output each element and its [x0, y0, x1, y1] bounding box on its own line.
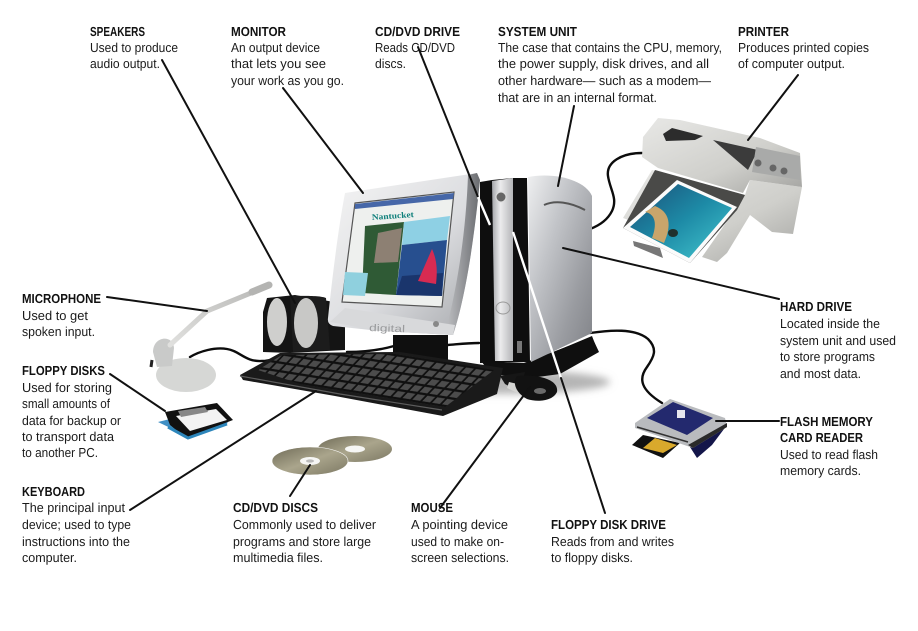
text: keyboard: KEYBOARD [22, 484, 85, 499]
text: mouse [411, 500, 509, 565]
text: mouse: MOUSE [411, 500, 453, 515]
text: mouse: A pointing device [411, 517, 508, 532]
leader: keyboard [130, 391, 316, 510]
text: mouse: screen selections. [411, 550, 509, 565]
text: speakers [90, 24, 178, 71]
monitor screen [342, 192, 454, 307]
icon: CD/DVD discs [272, 436, 392, 475]
leader: monitor [283, 88, 363, 193]
icon: monitor [328, 173, 480, 362]
text: flash memory card reader: FLASH MEMORY [780, 414, 873, 429]
text: CD/DVD drive: CD/DVD DRIVE [375, 24, 460, 39]
text: printer: of computer output. [738, 56, 845, 71]
text: system unit: SYSTEM UNIT [498, 24, 577, 39]
icon: microphone [151, 285, 269, 392]
text: keyboard: The principal input [22, 500, 125, 515]
text: printer: PRINTER [738, 24, 790, 39]
text: system unit: other hardware— such as a modem— [498, 73, 711, 88]
text: CD/DVD discs [233, 500, 377, 565]
text: microphone: spoken input. [22, 324, 95, 339]
text: monitor: MONITOR [231, 24, 287, 39]
text: keyboard: computer. [22, 550, 77, 565]
text: microphone: MICROPHONE [22, 291, 101, 306]
text: system unit: that are in an internal format. [498, 90, 657, 105]
text: microphone: Used to get [22, 308, 88, 323]
text: floppy disk drive [551, 517, 674, 565]
text: CD/DVD drive: Reads CD/DVD [375, 40, 455, 55]
text: microphone [22, 291, 101, 339]
text: hard drive: HARD DRIVE [780, 299, 852, 314]
text: hard drive [780, 299, 896, 381]
printed photo [623, 180, 737, 263]
leader: hard drive [563, 248, 779, 299]
icon: flash memory card reader [632, 399, 727, 458]
text: monitor: An output device [231, 40, 320, 55]
text: speakers: audio output. [90, 56, 160, 71]
text: system unit: The case that contains the CPU, memory, [498, 40, 722, 55]
text: floppy disks: Used for storing [22, 380, 112, 395]
icon: keyboard [240, 352, 503, 416]
text: hard drive: system unit and used [780, 333, 896, 348]
text: hard drive: and most data. [780, 366, 861, 381]
icon: speakers [263, 295, 345, 353]
text: CD/DVD drive [375, 24, 460, 71]
icon: printer [623, 118, 802, 263]
leader: CD/DVD drive [418, 47, 490, 225]
text: flash memory card reader: Used to read flash [780, 447, 878, 462]
shadow under desktop [390, 370, 610, 394]
text: floppy disk drive: Reads from and writes [551, 534, 674, 549]
text: floppy disk drive: to floppy disks. [551, 550, 633, 565]
text: CD/DVD discs: programs and store large [233, 534, 371, 549]
leader: system unit [558, 106, 574, 186]
text: keyboard: device; used to type [22, 517, 131, 532]
leader: floppy disk drive [513, 232, 605, 513]
text: printer: Produces printed copies [738, 40, 869, 55]
monitor screen: Nantucket [371, 209, 414, 222]
leader: printer [748, 75, 798, 140]
text: flash memory card reader [780, 414, 878, 478]
text: flash memory card reader: CARD READER [780, 430, 864, 445]
leader: flash memory card reader [716, 420, 779, 422]
text: floppy disk drive: FLOPPY DISK DRIVE [551, 517, 666, 532]
text: monitor [231, 24, 344, 88]
cables [190, 153, 662, 403]
text: flash memory card reader: memory cards. [780, 463, 861, 478]
icon: floppy disks [158, 403, 233, 438]
text: hard drive: to store programs [780, 349, 875, 364]
text: CD/DVD discs: CD/DVD DISCS [233, 500, 318, 515]
text: hard drive: Located inside the [780, 316, 880, 331]
text: monitor: your work as you go. [231, 73, 344, 88]
leader: microphone [107, 297, 207, 311]
text: floppy disks: to another PC. [22, 445, 98, 460]
icon: system unit tower [480, 176, 599, 378]
icon: monitor: digital [369, 323, 405, 335]
text: keyboard [22, 484, 131, 565]
icon: mouse [500, 372, 557, 401]
text: floppy disks: to transport data [22, 429, 115, 444]
text: printer [738, 24, 869, 71]
text: CD/DVD discs: Commonly used to deliver [233, 517, 377, 532]
text: floppy disks: FLOPPY DISKS [22, 363, 105, 378]
text: speakers: SPEAKERS [90, 24, 145, 39]
leader: CD/DVD discs [290, 465, 310, 496]
text: keyboard: instructions into the [22, 534, 130, 549]
text: CD/DVD discs: multimedia files. [233, 550, 323, 565]
text: mouse: used to make on- [411, 534, 504, 549]
text: floppy disks: small amounts of [22, 396, 110, 411]
text: monitor: that lets you see [231, 56, 326, 71]
leader: mouse [440, 387, 530, 508]
text: speakers: Used to produce [90, 40, 178, 55]
leader: speakers [162, 60, 295, 303]
text: floppy disks [22, 363, 122, 460]
text: floppy disks: data for backup or [22, 413, 122, 428]
leader: floppy disks [110, 374, 165, 411]
text: system unit: the power supply, disk drives, and all [498, 56, 709, 71]
text: CD/DVD drive: discs. [375, 56, 406, 71]
text: system unit [498, 24, 722, 105]
